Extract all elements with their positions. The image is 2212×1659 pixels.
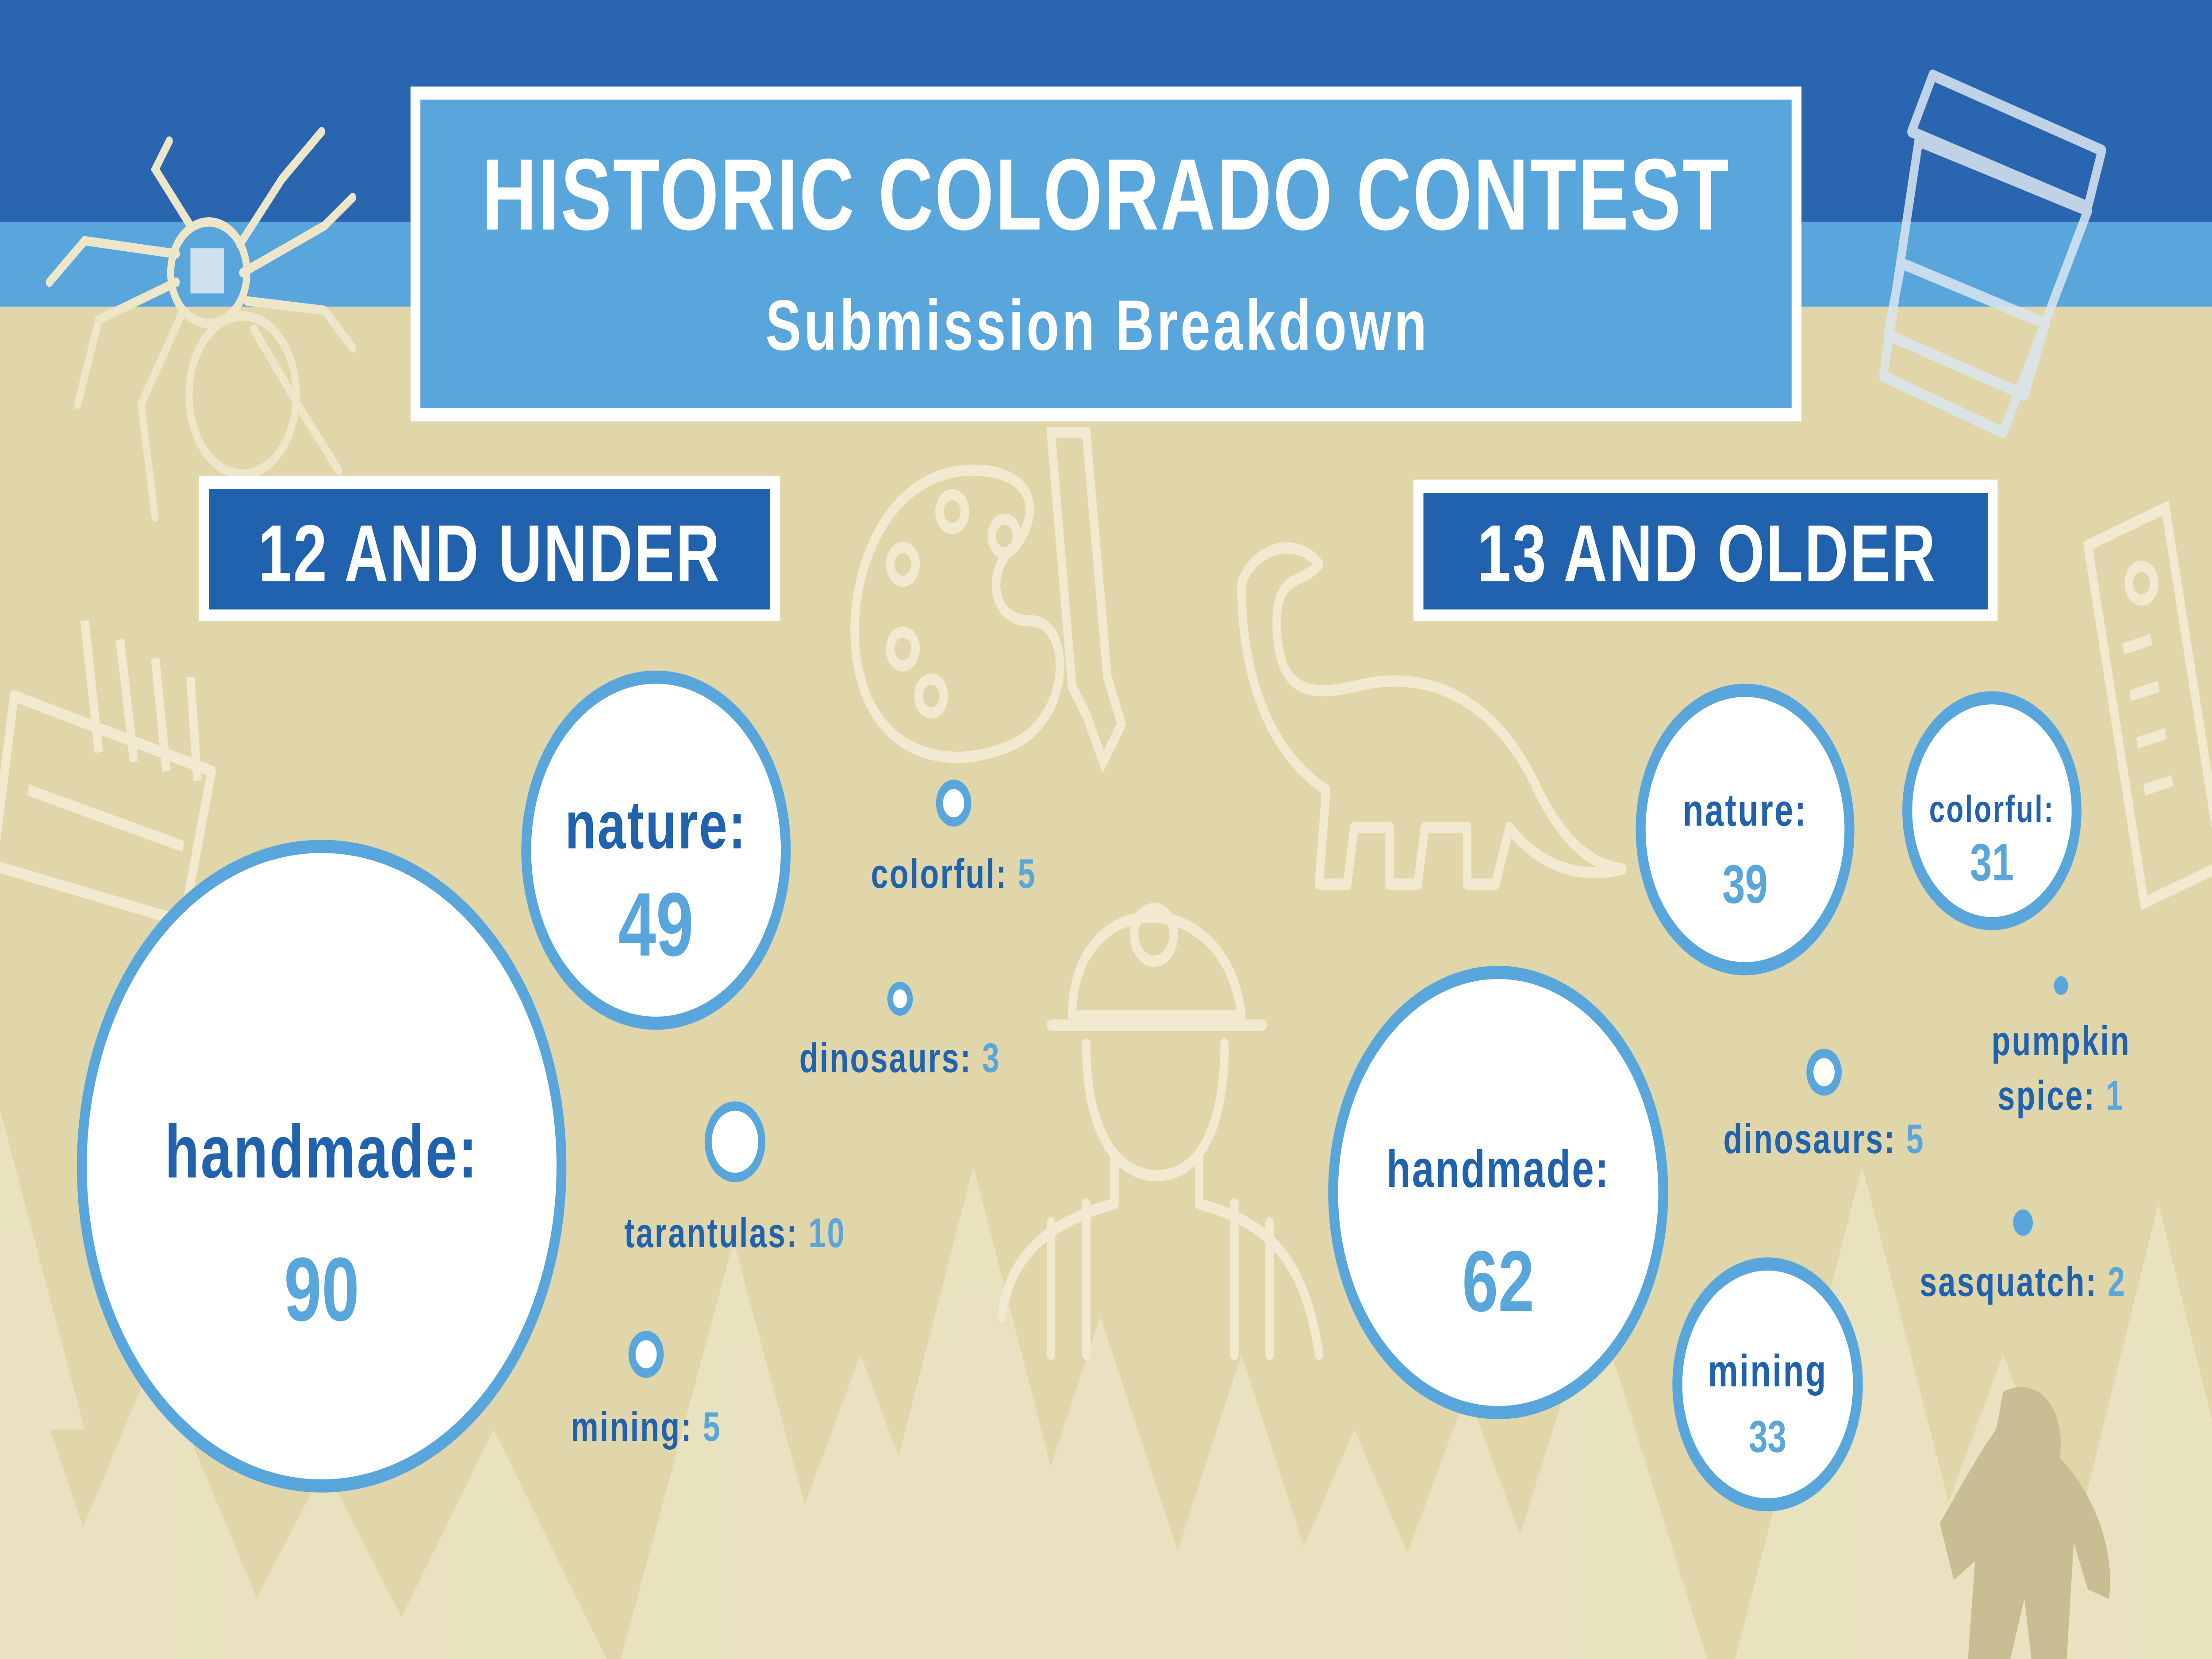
bubble: mining 5 <box>571 1336 722 1450</box>
bubble: handmade 62: 62 <box>1462 1233 1534 1329</box>
bubble: colorful 5: colorful: 5 <box>871 850 1037 897</box>
bubble: dinosaurs 3: dinosaurs: 3 <box>799 1035 1001 1081</box>
bubble: handmade 90: 90 <box>284 1239 359 1340</box>
bubble: colorful 31: colorful: <box>1929 788 2055 830</box>
bubble: colorful 31 <box>1907 698 2077 924</box>
bubble: nature 49: nature: <box>565 787 747 863</box>
title text: HISTORIC COLORADO CONTEST <box>482 138 1730 251</box>
background: trees <box>0 1110 2212 1659</box>
bubble: mining 33: 33 <box>1749 1412 1786 1462</box>
bubble: nature 39: nature: <box>1683 785 1807 836</box>
bubble: mining 5: mining: 5 <box>571 1403 722 1450</box>
bubble: nature 39 <box>1641 690 1849 969</box>
bubble: sasquatch 2 <box>1920 1210 2126 1305</box>
bubble: dinosaurs 3 <box>799 986 1001 1081</box>
icon: crayons <box>0 621 211 922</box>
bubble: colorful 31: 31 <box>1970 833 2014 892</box>
icon: dinosaur <box>1241 548 1622 884</box>
icon: miner <box>1002 909 1319 1354</box>
heading: 12 and under <box>199 476 780 621</box>
heading: 13 and older <box>1413 480 1997 621</box>
bubble: tarantulas 10: tarantulas: 10 <box>624 1210 846 1256</box>
bubble: handmade 62: handmade: <box>1386 1140 1610 1198</box>
icon: coffee cup <box>1883 75 2102 433</box>
bubble: dinosaurs 5 <box>1723 1053 1925 1162</box>
icon: sasquatch <box>1940 1387 2110 1659</box>
bubble: colorful 5 <box>871 784 1037 897</box>
bubble: handmade 90: handmade: <box>165 1110 479 1194</box>
icon: spider <box>50 132 353 517</box>
heading: 12 and under: 12 AND UNDER <box>258 509 721 599</box>
bubble: dinosaurs 5: dinosaurs: 5 <box>1723 1115 1925 1162</box>
icon: palette and brush <box>855 433 1121 762</box>
bubble: pumpkin spice 1 <box>1992 976 2131 1119</box>
icon: ruler <box>2088 508 2212 903</box>
heading: 13 and older: 13 AND OLDER <box>1477 509 1937 599</box>
bubble: mining 33: mining <box>1708 1346 1828 1396</box>
subtitle: Submission Breakdown <box>765 286 1429 365</box>
bubble: pumpkin spice 1: pumpkin <box>1992 1018 2131 1064</box>
title box <box>411 87 1801 421</box>
bubble: tarantulas 10 <box>624 1106 846 1256</box>
bubble: mining 33 <box>1677 1264 1858 1505</box>
bubble: nature 39: 39 <box>1722 854 1768 915</box>
bubble: nature 49 <box>526 677 786 1023</box>
bubble: sasquatch 2: sasquatch: 2 <box>1920 1259 2126 1305</box>
bubble: pumpkin spice 1: spice: 1 <box>1997 1072 2124 1119</box>
bubble: nature 49: 49 <box>618 875 694 975</box>
bubble: handmade 90 <box>82 846 561 1486</box>
bubble: handmade 62 <box>1333 972 1663 1413</box>
